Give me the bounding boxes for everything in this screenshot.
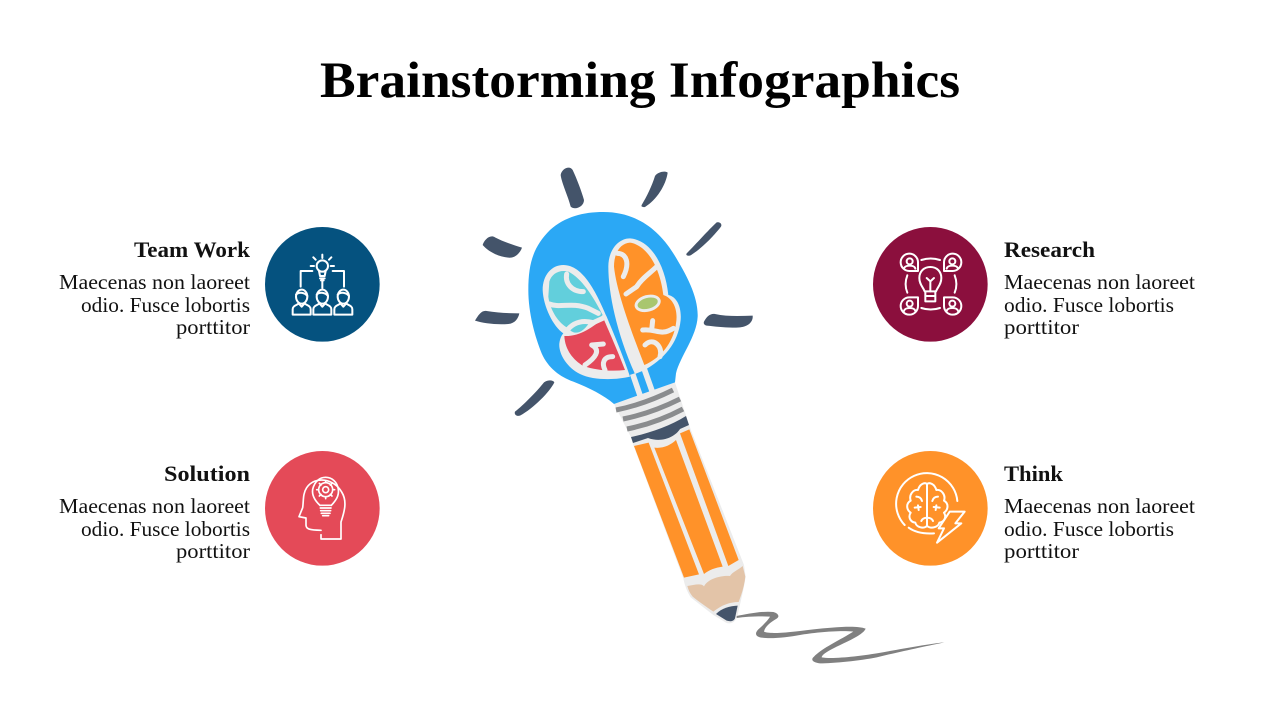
pencil orange stripes	[634, 429, 739, 578]
text block: research: porttitor	[1004, 315, 1079, 339]
light rays and bulb	[475, 168, 753, 416]
pencil collar	[631, 416, 689, 443]
text block: think: Maecenas non laoreet	[1004, 494, 1195, 518]
scribble line	[737, 612, 944, 663]
central illustration: light bulb pencil	[475, 168, 944, 663]
left brain lobe: teal	[548, 271, 603, 333]
bulb screw thread	[616, 390, 683, 429]
text block: solution	[59, 494, 250, 563]
text block: team work	[59, 270, 250, 339]
text block: solution: Maecenas non laoreet	[59, 494, 250, 518]
panel: research	[873, 227, 1195, 342]
pencil wood tip	[687, 566, 745, 612]
pencil lead	[716, 606, 738, 621]
brain folds	[549, 253, 673, 370]
bulb glass	[528, 212, 698, 404]
heading: research: Research	[1004, 237, 1095, 262]
right brain lobe: orange	[614, 243, 677, 365]
text block: research: odio. Fusce lobortis	[1004, 293, 1174, 317]
panel: team work	[59, 227, 380, 342]
text block: solution: porttitor	[176, 539, 250, 563]
text block: team work: porttitor	[176, 315, 250, 339]
icon: head with bulb and gear	[265, 451, 380, 566]
rays	[475, 168, 753, 416]
text block: research	[1004, 270, 1195, 339]
left brain lobe: red	[564, 318, 625, 371]
heading: think: Think	[1004, 461, 1064, 486]
panel: think	[873, 451, 1195, 566]
text block: solution: odio. Fusce lobortis	[81, 517, 250, 541]
pencil body	[614, 382, 944, 663]
panel: solution	[59, 451, 380, 566]
icon: brain with lightning	[873, 451, 988, 566]
heading: solution: Solution	[164, 461, 250, 486]
text block: research: Maecenas non laoreet	[1004, 270, 1195, 294]
brain stem	[633, 368, 653, 398]
icon: bulb with four people	[873, 227, 988, 342]
text block: team work: Maecenas non laoreet	[59, 270, 250, 294]
text block: think: odio. Fusce lobortis	[1004, 517, 1174, 541]
title: Brainstorming Infographics	[320, 53, 960, 109]
leaf highlight	[633, 292, 663, 315]
icon: team with light bulb	[265, 227, 380, 342]
text block: think	[1004, 494, 1195, 563]
heading: team work: Team Work	[134, 237, 251, 262]
brain outline	[543, 238, 681, 379]
text block: team work: odio. Fusce lobortis	[81, 293, 250, 317]
text block: think: porttitor	[1004, 539, 1079, 563]
